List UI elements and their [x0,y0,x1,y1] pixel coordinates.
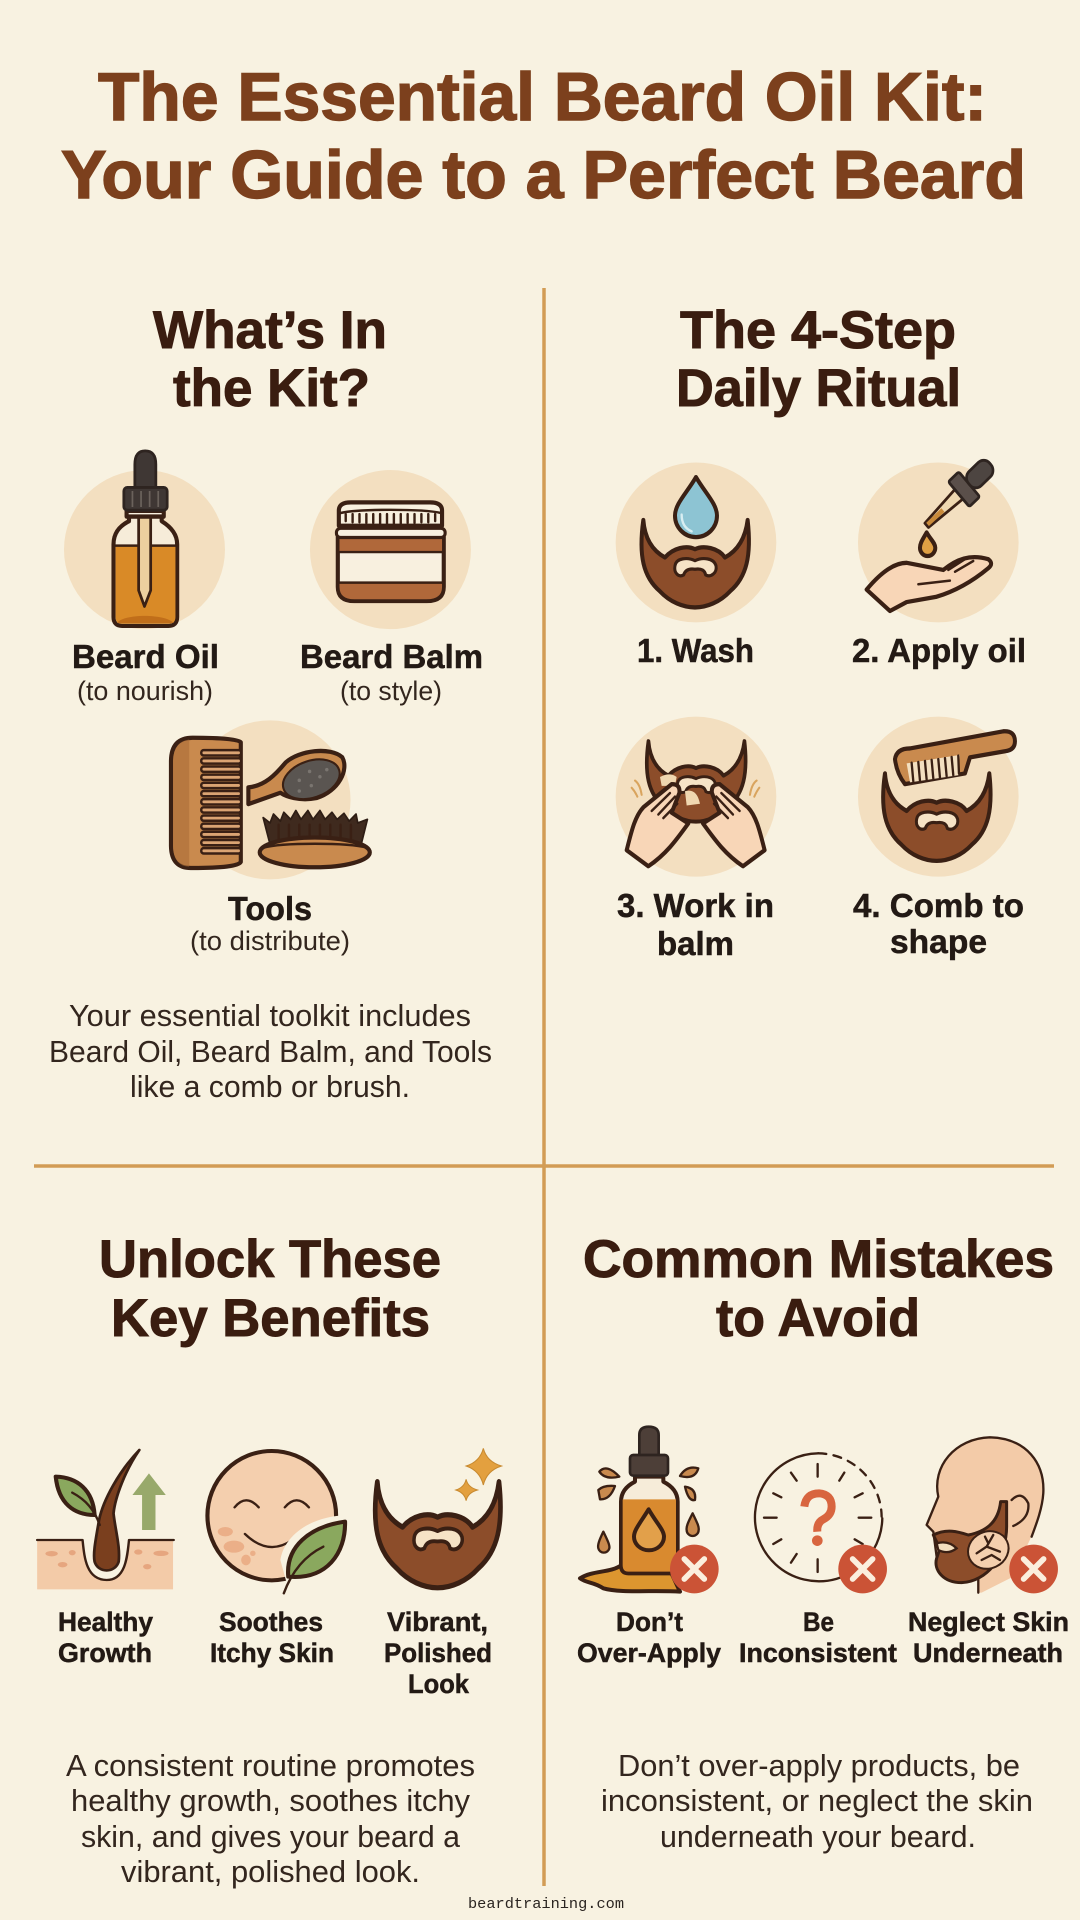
text block: kit summary: Beard Oil, Beard Balm, and Tools [49,1034,492,1069]
label: step 1: 1. Wash [637,632,754,669]
text block: benefits summary: healthy growth, soothes itchy [71,1783,470,1818]
panel: key benefits [37,1230,502,1889]
heading: common mistakes [583,1230,1054,1348]
heading: daily ritual: Daily Ritual [676,359,961,418]
label: beard balm: (to style) [340,676,442,706]
heading: key benefits: Unlock These [99,1230,441,1289]
label: beard balm: Beard Balm [300,638,483,675]
heading: common mistakes: to Avoid [716,1289,920,1348]
icon: step 1 wash [616,462,776,622]
label: beard oil [72,638,219,706]
label: step 3: balm [657,925,734,962]
text block: mistakes summary [601,1748,1033,1854]
heading: key benefits: Key Benefits [111,1289,430,1348]
label: step 4: shape [890,923,987,960]
text block: mistakes summary: underneath your beard. [660,1819,976,1854]
icon: step 4 comb to shape [858,717,1019,877]
label: beard oil: (to nourish) [77,676,213,706]
heading: common mistakes: Common Mistakes [583,1230,1054,1289]
icon: beard balm jar [310,470,471,629]
label: beard balm [300,638,483,706]
heading: daily ritual [676,301,961,418]
label: beard oil: Beard Oil [72,638,219,675]
label: vibrant polished look: Polished [384,1638,492,1668]
label: tools [190,890,350,956]
text block: kit summary: like a comb or brush. [130,1069,410,1104]
title: Your Guide to a Perfect Beard [61,137,1026,213]
icon: comb and brushes [171,720,370,879]
label: soothes itchy skin [210,1607,334,1668]
icon: inconsistent clock [755,1453,887,1593]
label: soothes itchy skin: Itchy Skin [210,1638,334,1668]
text block: benefits summary: skin, and gives your beard a [81,1819,461,1854]
heading: key benefits [99,1230,441,1348]
label: tools: (to distribute) [190,926,350,956]
label: healthy growth [58,1607,153,1668]
icon: over-apply bottle [580,1427,719,1593]
label: be inconsistent: Inconsistent [739,1638,897,1668]
panel: what's in the kit [49,301,492,1104]
text block: mistakes summary: Don’t over-apply products, be [618,1748,1020,1783]
label: step 3: 3. Work in [617,887,774,924]
label: neglect skin underneath [908,1607,1069,1668]
label: healthy growth: Healthy [58,1607,153,1637]
icon: healthy growth [37,1450,174,1589]
label: be inconsistent: Be [803,1607,834,1637]
text block: benefits summary [66,1748,475,1889]
footer source: beardtraining.com [468,1896,624,1913]
label: don't over-apply [577,1607,721,1668]
heading: daily ritual: The 4-Step [680,301,956,360]
label: don't over-apply: Over-Apply [577,1638,721,1668]
icon: step 2 apply oil [858,451,1019,622]
heading: what's in the kit [153,301,387,418]
label: neglect skin underneath: Underneath [913,1638,1063,1668]
title: The Essential Beard Oil Kit: [98,59,987,135]
label: step 3 [617,887,774,962]
icon: step 3 work in balm [616,717,776,877]
label: step 2: 2. Apply oil [852,632,1026,669]
label: healthy growth: Growth [58,1638,152,1668]
text block: mistakes summary: inconsistent, or neglect the skin [601,1783,1033,1818]
label: tools: Tools [228,890,312,927]
label: don't over-apply: Don’t [616,1607,683,1637]
title [61,59,1026,213]
icon: neglected skin head [927,1437,1058,1593]
icon: vibrant polished beard [375,1448,502,1588]
heading: what's in the kit: What’s In [153,301,387,360]
text block: kit summary: Your essential toolkit includes [69,998,471,1033]
label: vibrant polished look [384,1607,492,1699]
label: neglect skin underneath: Neglect Skin [908,1607,1069,1637]
label: be inconsistent [739,1607,897,1668]
panel: daily ritual [616,301,1026,962]
label: soothes itchy skin: Soothes [219,1607,323,1637]
label: vibrant polished look: Look [408,1669,470,1699]
label: vibrant polished look: Vibrant, [387,1607,488,1637]
text block: benefits summary: A consistent routine promotes [66,1748,475,1783]
icon: soothes itchy skin [207,1451,351,1593]
text block: benefits summary: vibrant, polished look. [121,1854,420,1889]
panel: common mistakes [577,1230,1069,1854]
icon: beard oil bottle [64,451,225,629]
text block: kit summary [49,998,492,1104]
heading: what's in the kit: the Kit? [173,359,370,418]
label: step 4 [853,887,1024,960]
label: step 4: 4. Comb to [853,887,1024,924]
